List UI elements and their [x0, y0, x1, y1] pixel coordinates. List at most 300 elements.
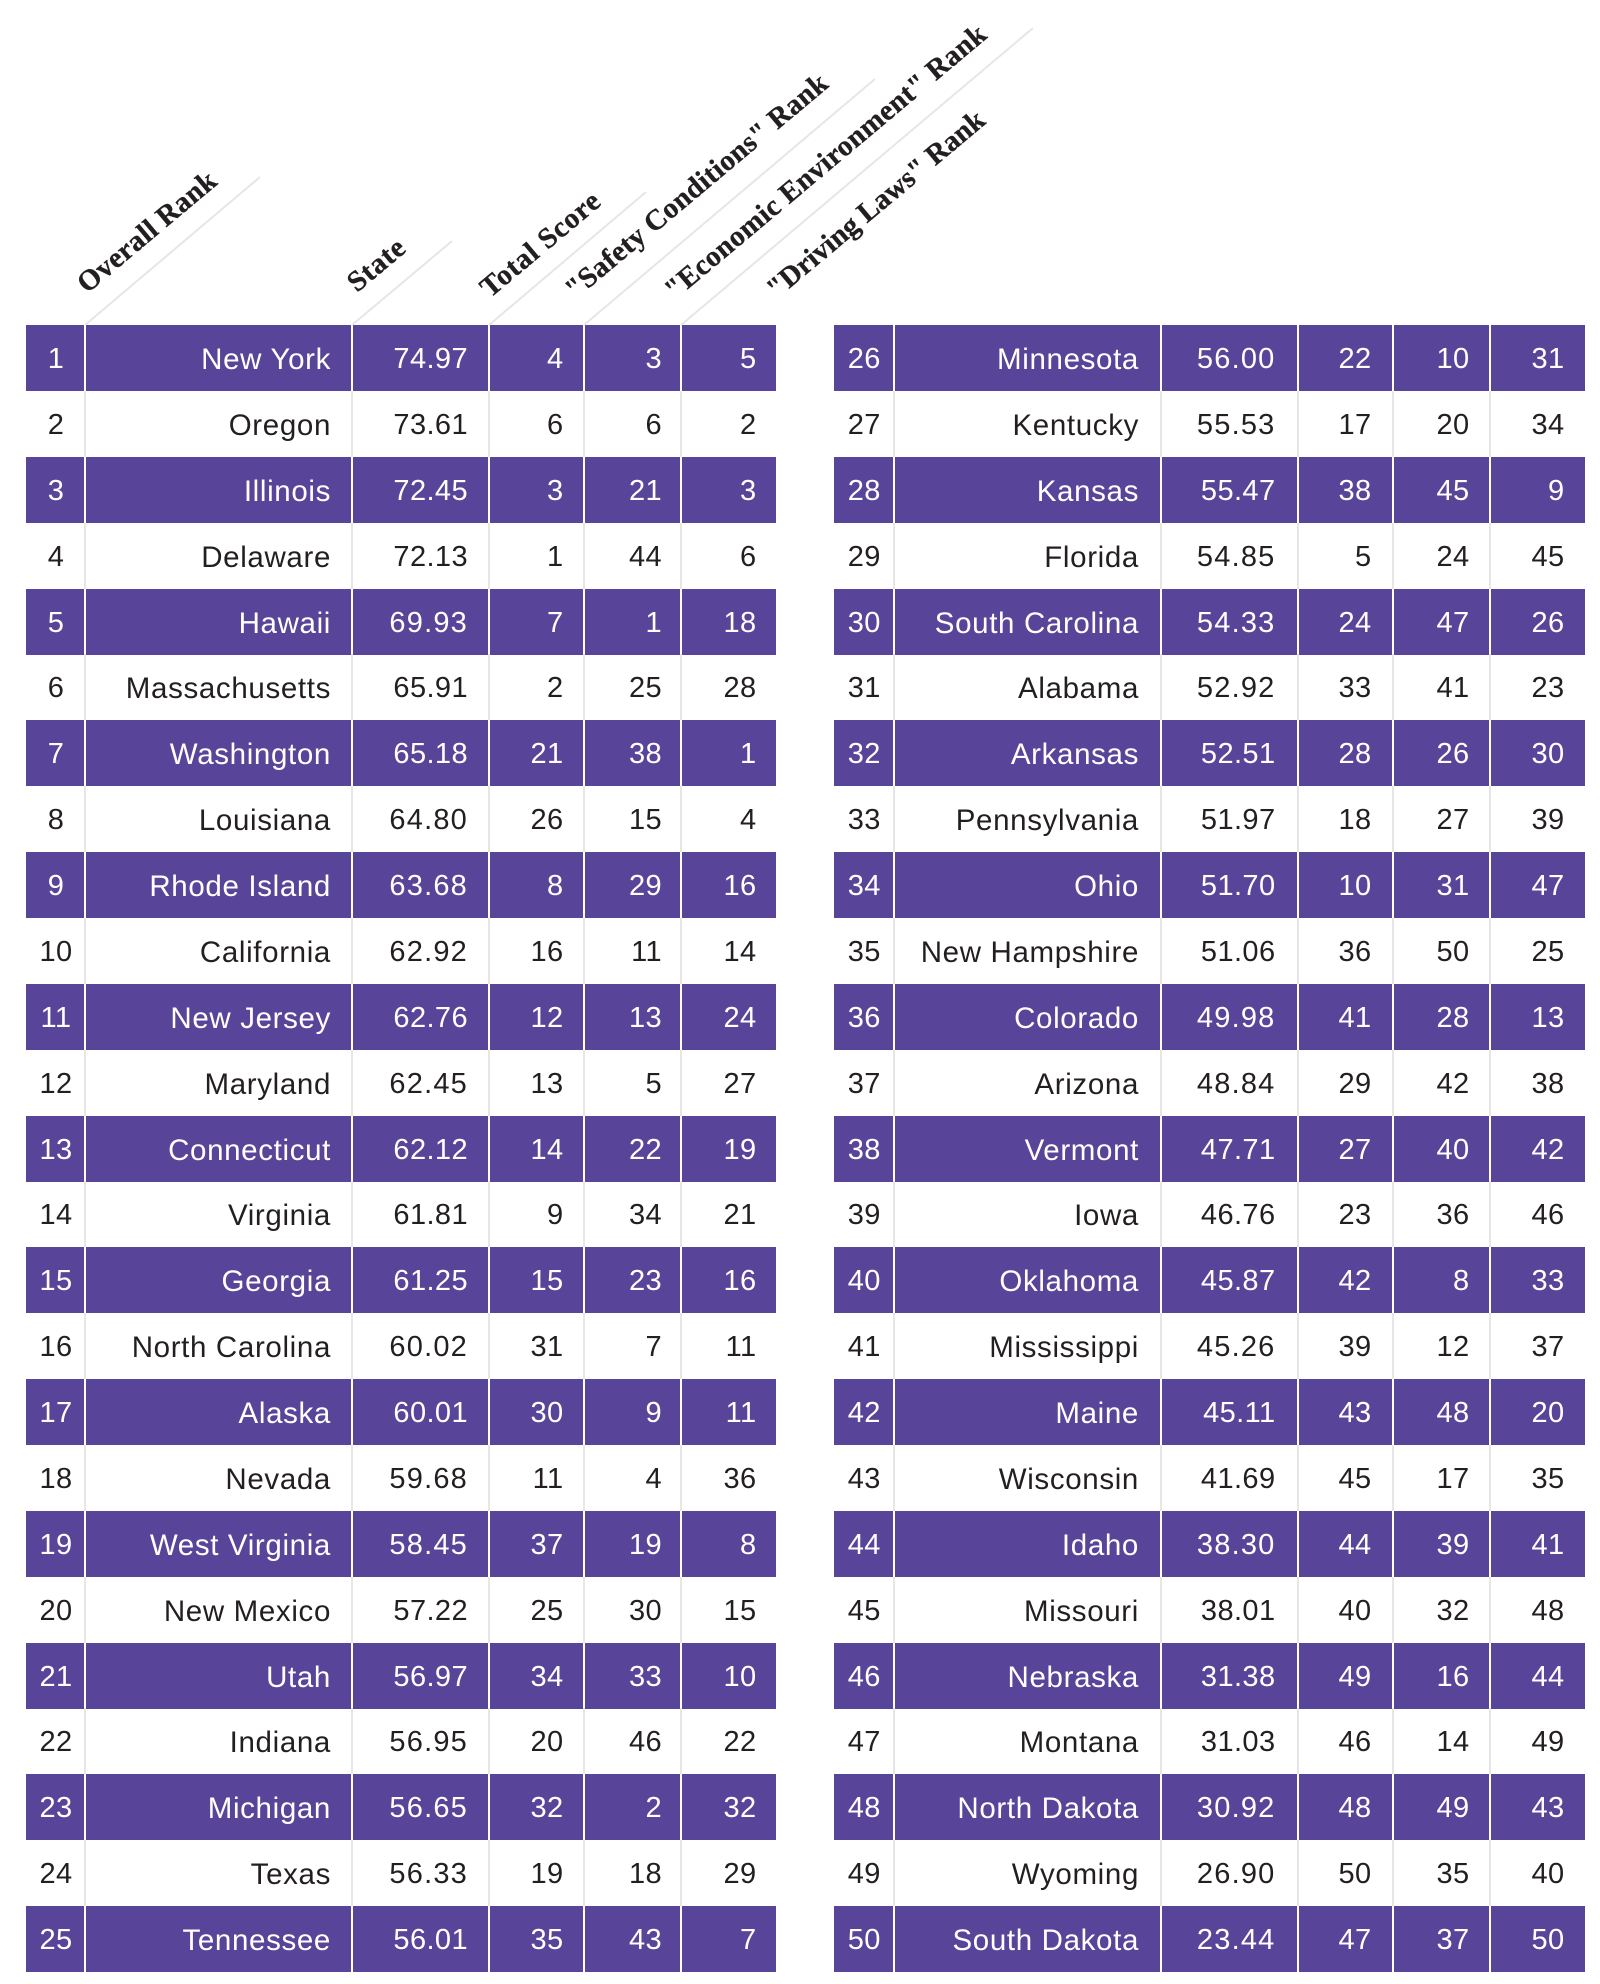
- row 19 West Virginia: 19: [39, 1529, 73, 1561]
- row 31 Alabama: 31: [848, 672, 881, 704]
- row 22 Indiana: Indiana: [230, 1726, 331, 1759]
- row 41 Mississippi: 41: [848, 1331, 881, 1363]
- row 6 Massachusetts: 65.91: [393, 672, 468, 704]
- row 41 Mississippi: 45.26: [1197, 1331, 1276, 1363]
- row 4 Delaware: 44: [629, 541, 662, 573]
- row 6 Massachusetts: 2: [547, 672, 564, 704]
- row 2 Oregon: Oregon: [229, 409, 331, 442]
- row 3 Illinois: 3: [547, 475, 564, 507]
- row 14 Virginia: 34: [629, 1199, 662, 1231]
- row 20 New Mexico: New Mexico: [164, 1595, 331, 1628]
- row 28 Kansas: 9: [1548, 475, 1564, 507]
- row 16 North Carolina: 7: [645, 1331, 662, 1363]
- row 31 Alabama: [848, 654, 1564, 720]
- row 11 New Jersey: 11: [41, 1002, 71, 1034]
- row 42 Maine: 43: [1338, 1397, 1372, 1429]
- row 40 Oklahoma: 40: [848, 1265, 881, 1297]
- row 21 Utah: 33: [629, 1660, 662, 1692]
- row 42 Maine: 20: [1531, 1397, 1564, 1429]
- row 14 Virginia: Virginia: [228, 1199, 331, 1232]
- row 49 Wyoming: 40: [1531, 1858, 1564, 1890]
- row 28 Kansas: 45: [1436, 475, 1470, 507]
- row 9 Rhode Island: Rhode Island: [149, 870, 331, 903]
- row 11 New Jersey: 12: [530, 1002, 564, 1034]
- row 48 North Dakota: 49: [1436, 1792, 1470, 1824]
- row 34 Ohio: 34: [848, 870, 881, 902]
- row 21 Utah: 21: [39, 1660, 73, 1692]
- row 3 Illinois: 3: [48, 475, 64, 507]
- row 35 New Hampshire: 50: [1436, 936, 1470, 968]
- row 36 Colorado: 36: [848, 1002, 881, 1034]
- row 50 South Dakota: 23.44: [1197, 1924, 1276, 1956]
- row 45 Missouri: 45: [848, 1595, 881, 1627]
- row 29 Florida: 45: [1531, 541, 1564, 573]
- row 19 West Virginia: 8: [740, 1529, 756, 1561]
- row 44 Idaho: 44: [1338, 1529, 1372, 1561]
- row 9 Rhode Island: 9: [48, 870, 64, 902]
- row 46 Nebraska: [834, 1642, 1585, 1708]
- row 35 New Hampshire: 35: [848, 936, 881, 968]
- row 19 West Virginia: 37: [530, 1529, 564, 1561]
- row 23 Michigan: 2: [645, 1792, 662, 1824]
- row 44 Idaho: 44: [848, 1529, 881, 1561]
- row 25 Tennessee: 43: [629, 1924, 662, 1956]
- row 46 Nebraska: 46: [848, 1660, 881, 1692]
- row 17 Alaska: [26, 1379, 776, 1445]
- row 26 Minnesota: 26: [848, 343, 881, 375]
- row 39 Iowa: 39: [848, 1199, 881, 1231]
- row 18 Nevada: 18: [39, 1463, 73, 1495]
- row 30 South Carolina: 47: [1436, 606, 1470, 638]
- row 4 Delaware: 72.13: [393, 541, 468, 573]
- row 30 South Carolina: [834, 589, 1585, 655]
- row 37 Arizona: 38: [1531, 1068, 1564, 1100]
- row 23 Michigan: 56.65: [389, 1792, 468, 1824]
- row 27 Kentucky: 27: [848, 409, 881, 441]
- row 50 South Dakota: 37: [1436, 1924, 1470, 1956]
- row 47 Montana: Montana: [1020, 1726, 1139, 1759]
- row 8 Louisiana: [48, 786, 756, 852]
- row 35 New Hampshire: [848, 918, 1564, 984]
- row 26 Minnesota: 10: [1436, 343, 1470, 375]
- row 27 Kentucky: 20: [1436, 409, 1470, 441]
- row 14 Virginia: 9: [547, 1199, 564, 1231]
- row 34 Ohio: [834, 852, 1585, 918]
- row 3 Illinois: 3: [740, 475, 756, 507]
- row 31 Alabama: 23: [1531, 672, 1564, 704]
- row 4 Delaware: 4: [48, 541, 64, 573]
- row 11 New Jersey: 62.76: [393, 1002, 468, 1034]
- row 3 Illinois: 21: [629, 475, 662, 507]
- row 7 Washington: Washington: [170, 738, 331, 771]
- row 33 Pennsylvania: [848, 786, 1564, 852]
- row 38 Vermont: 42: [1531, 1134, 1564, 1166]
- row 24 Texas: 24: [39, 1858, 73, 1890]
- row 22 Indiana: [39, 1708, 756, 1774]
- row 40 Oklahoma: 42: [1338, 1265, 1372, 1297]
- row 26 Minnesota: Minnesota: [997, 343, 1139, 376]
- row 20 New Mexico: 25: [530, 1595, 564, 1627]
- row 9 Rhode Island: [26, 852, 776, 918]
- row 5 Hawaii: 18: [723, 606, 756, 638]
- row 37 Arizona: 42: [1436, 1068, 1470, 1100]
- row 5 Hawaii: 69.93: [389, 606, 468, 638]
- row 37 Arizona: Arizona: [1034, 1068, 1139, 1101]
- row 36 Colorado: 49.98: [1197, 1002, 1276, 1034]
- row 48 North Dakota: North Dakota: [957, 1792, 1139, 1825]
- row 24 Texas: [39, 1840, 756, 1906]
- row 38 Vermont: [834, 1116, 1585, 1182]
- row 16 North Carolina: 31: [530, 1331, 564, 1363]
- row 24 Texas: 29: [723, 1858, 756, 1890]
- row 22 Indiana: 20: [530, 1726, 564, 1758]
- row 29 Florida: 24: [1436, 541, 1470, 573]
- row 23 Michigan: 23: [39, 1792, 73, 1824]
- row 19 West Virginia: 58.45: [389, 1529, 468, 1561]
- row 47 Montana: 46: [1338, 1726, 1372, 1758]
- row 13 Connecticut: [26, 1116, 776, 1182]
- row 16 North Carolina: 60.02: [389, 1331, 468, 1363]
- row 33 Pennsylvania: 18: [1338, 804, 1372, 836]
- row 7 Washington: 7: [48, 738, 64, 770]
- row 32 Arkansas: [834, 720, 1585, 786]
- row 40 Oklahoma: Oklahoma: [999, 1265, 1139, 1298]
- row 40 Oklahoma: 8: [1453, 1265, 1470, 1297]
- row 32 Arkansas: Arkansas: [1011, 738, 1139, 771]
- row 1 New York: 4: [547, 343, 564, 375]
- row 34 Ohio: 47: [1531, 870, 1564, 902]
- row 34 Ohio: Ohio: [1074, 870, 1139, 903]
- row 48 North Dakota: 30.92: [1197, 1792, 1276, 1824]
- row 45 Missouri: 32: [1436, 1595, 1470, 1627]
- row 25 Tennessee: 7: [740, 1924, 756, 1956]
- row 43 Wisconsin: 43: [848, 1463, 881, 1495]
- row 37 Arizona: 29: [1338, 1068, 1372, 1100]
- row 4 Delaware: Delaware: [201, 541, 331, 574]
- row 37 Arizona: 48.84: [1197, 1068, 1276, 1100]
- row 18 Nevada: 11: [533, 1463, 564, 1495]
- row 50 South Dakota: 50: [848, 1924, 881, 1956]
- row 27 Kentucky: [848, 391, 1564, 457]
- row 49 Wyoming: 26.90: [1197, 1858, 1276, 1890]
- header: Overall Rank: Overall Rank: [71, 164, 224, 299]
- row 22 Indiana: 46: [629, 1726, 662, 1758]
- row 32 Arkansas: 28: [1338, 738, 1372, 770]
- row 13 Connecticut: 62.12: [393, 1134, 468, 1166]
- row 45 Missouri: 38.01: [1201, 1595, 1276, 1627]
- row 30 South Carolina: 26: [1531, 606, 1564, 638]
- row 48 North Dakota: 48: [848, 1792, 881, 1824]
- row 10 California: [39, 918, 756, 984]
- row 13 Connecticut: 22: [629, 1134, 662, 1166]
- row 34 Ohio: 10: [1338, 870, 1372, 902]
- row 20 New Mexico: 30: [629, 1595, 662, 1627]
- row 36 Colorado: 28: [1436, 1002, 1470, 1034]
- row 22 Indiana: 56.95: [389, 1726, 468, 1758]
- row 24 Texas: Texas: [251, 1858, 331, 1891]
- row 27 Kentucky: Kentucky: [1012, 409, 1139, 442]
- row 37 Arizona: 37: [848, 1068, 881, 1100]
- row 43 Wisconsin: 45: [1338, 1463, 1372, 1495]
- row 20 New Mexico: 15: [723, 1595, 756, 1627]
- row 1 New York: 3: [645, 343, 662, 375]
- row 28 Kansas: Kansas: [1037, 475, 1139, 508]
- row 8 Louisiana: 26: [530, 804, 564, 836]
- row 2 Oregon: [48, 391, 756, 457]
- row 19 West Virginia: [26, 1511, 776, 1577]
- row 49 Wyoming: Wyoming: [1012, 1858, 1139, 1891]
- row 29 Florida: 54.85: [1197, 541, 1276, 573]
- row 22 Indiana: 22: [723, 1726, 756, 1758]
- row 18 Nevada: [39, 1445, 756, 1511]
- row 2 Oregon: 6: [547, 409, 564, 441]
- row 32 Arkansas: 32: [848, 738, 881, 770]
- row 4 Delaware: 6: [740, 541, 756, 573]
- row 13 Connecticut: 13: [39, 1134, 73, 1166]
- row 31 Alabama: 33: [1338, 672, 1372, 704]
- row 5 Hawaii: [26, 589, 776, 655]
- row 8 Louisiana: 4: [740, 804, 756, 836]
- row 17 Alaska: 60.01: [393, 1397, 468, 1429]
- row 47 Montana: [834, 1708, 1585, 1774]
- row 6 Massachusetts: 6: [48, 672, 64, 704]
- row 30 South Carolina: 54.33: [1197, 606, 1276, 638]
- row 7 Washington: 21: [530, 738, 564, 770]
- row 46 Nebraska: 44: [1531, 1660, 1564, 1692]
- row 39 Iowa: 23: [1338, 1199, 1372, 1231]
- row 15 Georgia: 23: [629, 1265, 662, 1297]
- row 30 South Carolina: 24: [1338, 606, 1372, 638]
- row 12 Maryland: 27: [723, 1068, 756, 1100]
- row 44 Idaho: 38.30: [1197, 1529, 1276, 1561]
- row 7 Washington: [26, 720, 776, 786]
- row 33 Pennsylvania: 39: [1531, 804, 1564, 836]
- row 44 Idaho: 41: [1531, 1529, 1564, 1561]
- row 19 West Virginia: West Virginia: [150, 1529, 331, 1562]
- row 14 Virginia: [39, 1181, 756, 1247]
- row 4 Delaware: [48, 523, 756, 589]
- row 9 Rhode Island: 63.68: [389, 870, 468, 902]
- row 24 Texas: 56.33: [389, 1858, 468, 1890]
- row 20 New Mexico: [39, 1577, 756, 1643]
- row 25 Tennessee: 25: [39, 1924, 73, 1956]
- row 6 Massachusetts: Massachusetts: [126, 672, 331, 705]
- row 42 Maine: 45.11: [1203, 1397, 1276, 1429]
- row 28 Kansas: 38: [1338, 475, 1372, 507]
- row 12 Maryland: 13: [530, 1068, 564, 1100]
- row 42 Maine: Maine: [1055, 1397, 1139, 1430]
- row 25 Tennessee: 35: [530, 1924, 564, 1956]
- row 43 Wisconsin: 17: [1436, 1463, 1470, 1495]
- row 43 Wisconsin: Wisconsin: [999, 1463, 1139, 1496]
- row 16 North Carolina: North Carolina: [132, 1331, 331, 1364]
- row 10 California: 11: [631, 936, 662, 968]
- row 18 Nevada: 36: [723, 1463, 756, 1495]
- row 43 Wisconsin: [834, 1445, 1585, 1511]
- row 47 Montana: 47: [848, 1726, 881, 1758]
- row 39 Iowa: 46.76: [1201, 1199, 1276, 1231]
- header: Safety Conditions Rank: "Safety Conditions" Rank: [559, 66, 835, 305]
- row 34 Ohio: 31: [1436, 870, 1470, 902]
- row 31 Alabama: Alabama: [1018, 672, 1139, 705]
- row 1 New York: 5: [740, 343, 756, 375]
- row 14 Virginia: 14: [39, 1199, 73, 1231]
- row 1 New York: 1: [48, 343, 64, 375]
- row 17 Alaska: 17: [39, 1397, 73, 1429]
- row 35 New Hampshire: New Hampshire: [921, 936, 1139, 969]
- row 1 New York: 74.97: [393, 343, 468, 375]
- row 44 Idaho: [834, 1511, 1585, 1577]
- row 17 Alaska: 30: [530, 1397, 564, 1429]
- row 48 North Dakota: 43: [1531, 1792, 1564, 1824]
- row 44 Idaho: Idaho: [1062, 1529, 1139, 1562]
- row 21 Utah: 10: [723, 1660, 756, 1692]
- row 14 Virginia: 61.81: [393, 1199, 468, 1231]
- row 34 Ohio: 51.70: [1201, 870, 1276, 902]
- row 36 Colorado: 13: [1531, 1002, 1564, 1034]
- row 42 Maine: 42: [848, 1397, 881, 1429]
- row 49 Wyoming: 50: [1338, 1858, 1372, 1890]
- row 32 Arkansas: 26: [1436, 738, 1470, 770]
- row 30 South Carolina: 30: [848, 606, 881, 638]
- row 5 Hawaii: Hawaii: [239, 606, 331, 640]
- row 18 Nevada: 4: [645, 1463, 662, 1495]
- header: Driving Laws Rank: "Driving Laws" Rank: [760, 103, 992, 305]
- row 17 Alaska: Alaska: [239, 1397, 331, 1430]
- row 8 Louisiana: 64.80: [389, 804, 468, 836]
- row 3 Illinois: Illinois: [244, 475, 331, 508]
- row 31 Alabama: 41: [1436, 672, 1470, 704]
- row 46 Nebraska: 16: [1436, 1660, 1470, 1692]
- row 3 Illinois: 72.45: [393, 475, 468, 507]
- row 23 Michigan: 32: [723, 1792, 756, 1824]
- row 8 Louisiana: 15: [629, 804, 662, 836]
- row 1 New York: New York: [201, 343, 331, 376]
- row 15 Georgia: 61.25: [393, 1265, 468, 1297]
- row 11 New Jersey: 24: [723, 1002, 756, 1034]
- row 43 Wisconsin: 41.69: [1201, 1463, 1276, 1495]
- row 5 Hawaii: 7: [547, 606, 564, 638]
- row 24 Texas: 19: [530, 1858, 564, 1890]
- row 47 Montana: 49: [1531, 1726, 1564, 1758]
- row 17 Alaska: 9: [645, 1397, 662, 1429]
- row 37 Arizona: [848, 1050, 1564, 1116]
- row 8 Louisiana: 8: [48, 804, 64, 836]
- row 23 Michigan: 32: [530, 1792, 564, 1824]
- row 46 Nebraska: 49: [1338, 1660, 1372, 1692]
- row 9 Rhode Island: 16: [723, 870, 756, 902]
- row 1 New York: [26, 325, 776, 391]
- row 45 Missouri: Missouri: [1024, 1595, 1139, 1628]
- row 45 Missouri: 40: [1338, 1595, 1372, 1627]
- row 7 Washington: 1: [740, 738, 756, 770]
- row 6 Massachusetts: 28: [723, 672, 756, 704]
- row 27 Kentucky: 17: [1338, 409, 1372, 441]
- row 20 New Mexico: 57.22: [393, 1595, 468, 1627]
- row 47 Montana: 31.03: [1201, 1726, 1276, 1758]
- row 12 Maryland: 5: [645, 1068, 662, 1100]
- row 12 Maryland: 12: [39, 1068, 73, 1100]
- row 41 Mississippi: 39: [1338, 1331, 1372, 1363]
- row 38 Vermont: 40: [1436, 1134, 1470, 1166]
- row 36 Colorado: Colorado: [1014, 1002, 1139, 1035]
- row 50 South Dakota: 47: [1338, 1924, 1372, 1956]
- row 3 Illinois: [26, 457, 776, 523]
- row 38 Vermont: 38: [848, 1134, 881, 1166]
- row 48 North Dakota: 48: [1338, 1792, 1372, 1824]
- row 46 Nebraska: 31.38: [1201, 1660, 1276, 1692]
- row 36 Colorado: 41: [1338, 1002, 1372, 1034]
- row 10 California: 62.92: [389, 936, 468, 968]
- row 28 Kansas: [834, 457, 1585, 523]
- row 41 Mississippi: 37: [1531, 1331, 1564, 1363]
- row 11 New Jersey: 13: [629, 1002, 662, 1034]
- row 12 Maryland: Maryland: [204, 1068, 331, 1101]
- row 49 Wyoming: 35: [1436, 1858, 1470, 1890]
- row 7 Washington: 65.18: [393, 738, 468, 770]
- row 41 Mississippi: 12: [1436, 1331, 1470, 1363]
- row 26 Minnesota: 22: [1338, 343, 1372, 375]
- row 49 Wyoming: [834, 1840, 1585, 1906]
- row 5 Hawaii: 1: [645, 606, 662, 638]
- row 5 Hawaii: 5: [48, 606, 64, 638]
- row 13 Connecticut: 19: [723, 1134, 756, 1166]
- row 45 Missouri: [834, 1577, 1585, 1643]
- row 2 Oregon: 73.61: [393, 409, 468, 441]
- row 15 Georgia: Georgia: [222, 1265, 331, 1298]
- row 2 Oregon: 2: [48, 409, 64, 441]
- row 42 Maine: [834, 1379, 1585, 1445]
- row 39 Iowa: [848, 1181, 1564, 1247]
- row 11 New Jersey: New Jersey: [170, 1002, 331, 1035]
- row 26 Minnesota: [834, 325, 1585, 391]
- header: Total Score: Total Score: [474, 185, 607, 304]
- row 50 South Dakota: [834, 1906, 1585, 1972]
- row 46 Nebraska: Nebraska: [1008, 1660, 1139, 1694]
- row 16 North Carolina: 11: [726, 1331, 756, 1363]
- row 18 Nevada: Nevada: [225, 1463, 331, 1496]
- row 13 Connecticut: 14: [530, 1134, 564, 1166]
- header: State: State: [341, 231, 412, 298]
- row 21 Utah: 56.97: [393, 1660, 468, 1692]
- row 35 New Hampshire: 51.06: [1201, 936, 1276, 968]
- row 38 Vermont: Vermont: [1025, 1134, 1139, 1166]
- row 29 Florida: [848, 523, 1564, 589]
- row 50 South Dakota: South Dakota: [952, 1924, 1139, 1957]
- row 47 Montana: 14: [1436, 1726, 1470, 1758]
- row 6 Massachusetts: 25: [629, 672, 662, 704]
- row 27 Kentucky: 34: [1531, 409, 1564, 441]
- row 35 New Hampshire: 25: [1531, 936, 1564, 968]
- row 21 Utah: Utah: [266, 1660, 331, 1694]
- row 41 Mississippi: [834, 1313, 1585, 1379]
- row 22 Indiana: 22: [39, 1726, 73, 1758]
- row 9 Rhode Island: 8: [547, 870, 564, 902]
- row 41 Mississippi: Mississippi: [989, 1331, 1139, 1364]
- row 20 New Mexico: 20: [39, 1595, 73, 1627]
- row 10 California: 10: [39, 936, 73, 968]
- row 38 Vermont: 27: [1338, 1134, 1372, 1166]
- row 33 Pennsylvania: 27: [1436, 804, 1470, 836]
- row 19 West Virginia: 19: [629, 1529, 662, 1561]
- row 44 Idaho: 39: [1436, 1529, 1470, 1561]
- row 31 Alabama: 52.92: [1197, 672, 1276, 704]
- row 29 Florida: 29: [848, 541, 881, 573]
- row 2 Oregon: 6: [645, 409, 662, 441]
- row 36 Colorado: [834, 984, 1585, 1050]
- column headers with angled rules: [71, 18, 1034, 326]
- row 23 Michigan: [26, 1774, 776, 1840]
